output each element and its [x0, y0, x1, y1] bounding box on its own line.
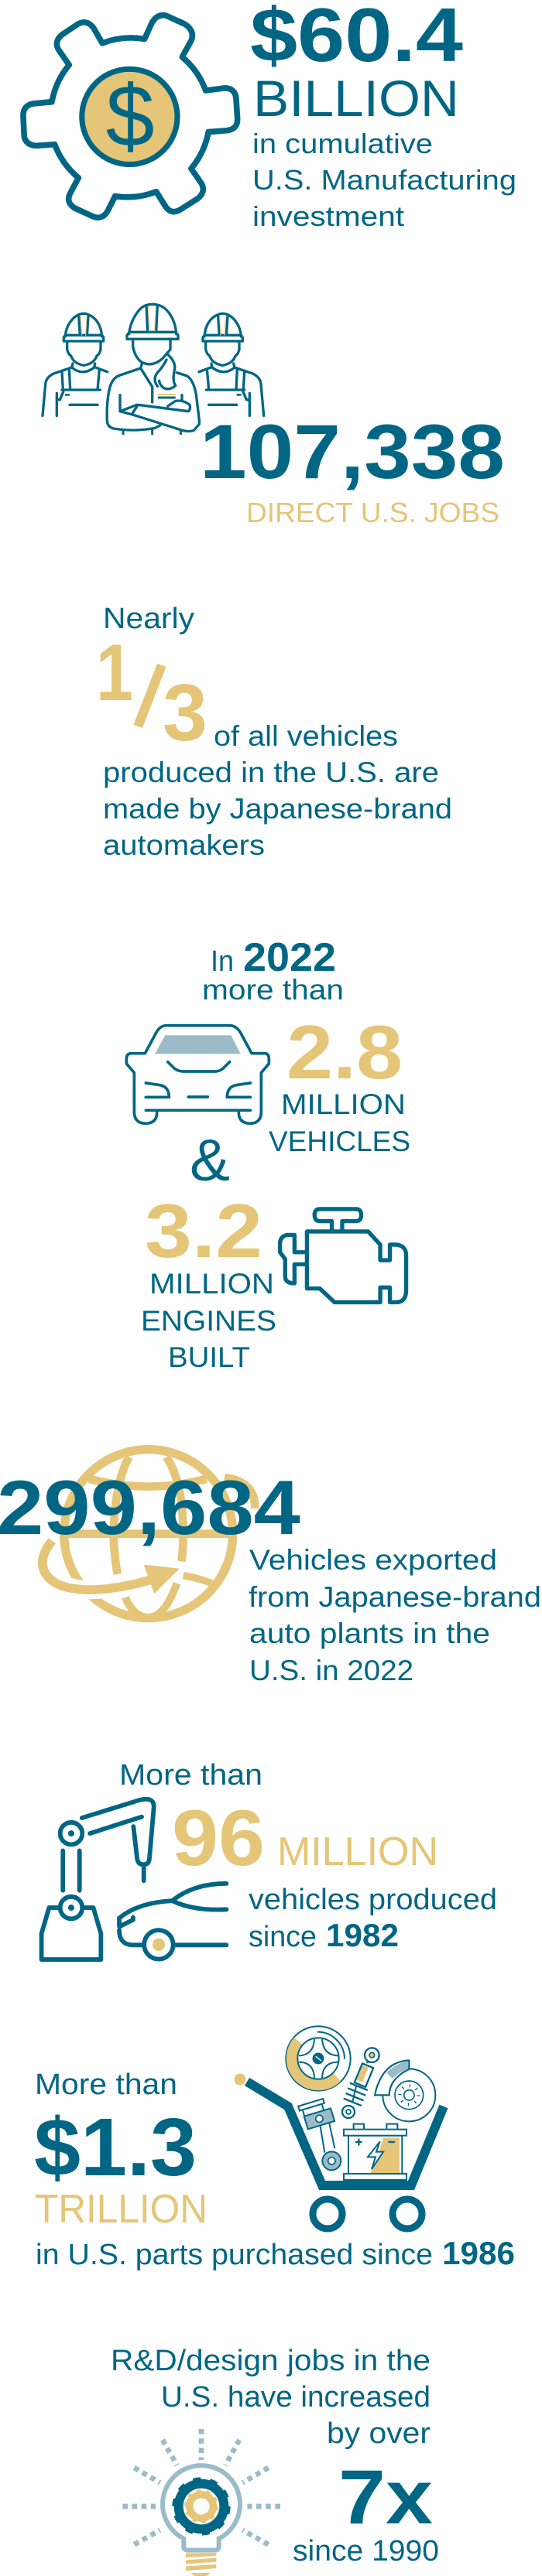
fraction: 1/3: 1: [96, 628, 133, 718]
panel: exports: [0, 1450, 541, 1686]
fraction: 1/3: [96, 628, 208, 758]
description line 2: U.S. have increased: [161, 2381, 431, 2414]
description line 2: produced in the U.S. are: [103, 757, 439, 788]
panel: one third of vehicles: [96, 603, 452, 861]
text: Nearly: Nearly: [103, 603, 194, 635]
stat: 96: 96: [172, 1794, 265, 1882]
description line 1: Vehicles exported: [249, 1544, 497, 1576]
panel: R&D jobs: [111, 2345, 439, 2576]
icon: car front: [126, 1026, 269, 1123]
description line 2: since: [249, 1921, 317, 1953]
panel: parts purchased: [34, 2026, 515, 2271]
panel: manufacturing investment: [23, 0, 516, 232]
icon: gear with dollar coin: [23, 15, 238, 217]
description line 2: U.S. Manufacturing: [252, 164, 516, 196]
stat: 3.2: 3.2: [145, 1188, 262, 1273]
icon: globe with arrow: [43, 1450, 255, 1618]
description line 3: by over: [327, 2417, 431, 2450]
description line 3: made by Japanese-brand: [103, 793, 452, 825]
stat: 107,338: 107,338: [200, 408, 505, 494]
fraction: 1/3: 3: [163, 668, 208, 758]
stat unit: MILLION: MILLION: [277, 1830, 438, 1874]
stat unit: BILLION: BILLION: [253, 70, 459, 127]
stat: $1.3: $1.3: [34, 2102, 197, 2193]
year: 1986: 1986: [442, 2235, 515, 2271]
text: since 1990: since 1990: [293, 2535, 439, 2567]
description line 3: auto plants in the: [249, 1618, 490, 1649]
description line 1: vehicles produced: [249, 1884, 497, 1916]
label: MILLION: MILLION: [149, 1268, 274, 1300]
icon: dollar sign: $: [106, 67, 154, 165]
label: direct U.S. jobs: DIRECT U.S. JOBS: [246, 497, 499, 528]
description line 3: investment: [252, 200, 404, 232]
year: 1982: 1982: [326, 1917, 399, 1953]
panel: direct jobs: [43, 304, 505, 528]
description: in U.S. parts purchased since: [36, 2239, 433, 2271]
panel: vehicles produced: [42, 1759, 497, 1959]
description line 2: from Japanese-brand: [249, 1581, 541, 1613]
text: more than: more than: [202, 974, 344, 1006]
panel: 2022 vehicles and engines: [126, 935, 410, 1373]
description line 1: of all vehicles: [214, 720, 398, 752]
description line 1: R&D/design jobs in the: [111, 2345, 431, 2377]
icon: shopping cart: [234, 2073, 444, 2229]
text: In: In: [211, 945, 234, 978]
label: ENGINES: ENGINES: [141, 1305, 276, 1337]
description line 4: automakers: [103, 829, 265, 861]
stat unit: TRILLION: TRILLION: [35, 2187, 208, 2232]
stat: 299,684: 299,684: [0, 1464, 300, 1550]
label: BUILT: BUILT: [168, 1341, 250, 1373]
icon: three workers in hard hats: [43, 304, 264, 435]
text: More than: More than: [35, 2069, 177, 2101]
label: VEHICLES: VEHICLES: [269, 1126, 410, 1157]
text: More than: More than: [119, 1759, 262, 1792]
year: 2022: 2022: [243, 935, 336, 980]
icon: engine: [280, 1209, 406, 1302]
description line 4: U.S. in 2022: [249, 1655, 413, 1686]
description line 1: in cumulative: [252, 128, 433, 159]
stat: 7x: 7x: [338, 2454, 433, 2540]
icon: car parts: [286, 2026, 435, 2180]
stat: 2.8: 2.8: [286, 1010, 403, 1095]
ampersand: &: [190, 1128, 230, 1194]
icon: robot arm and car: [42, 1799, 226, 1959]
label: MILLION: MILLION: [281, 1088, 406, 1120]
icon: light bulb with gears: [122, 2429, 280, 2576]
